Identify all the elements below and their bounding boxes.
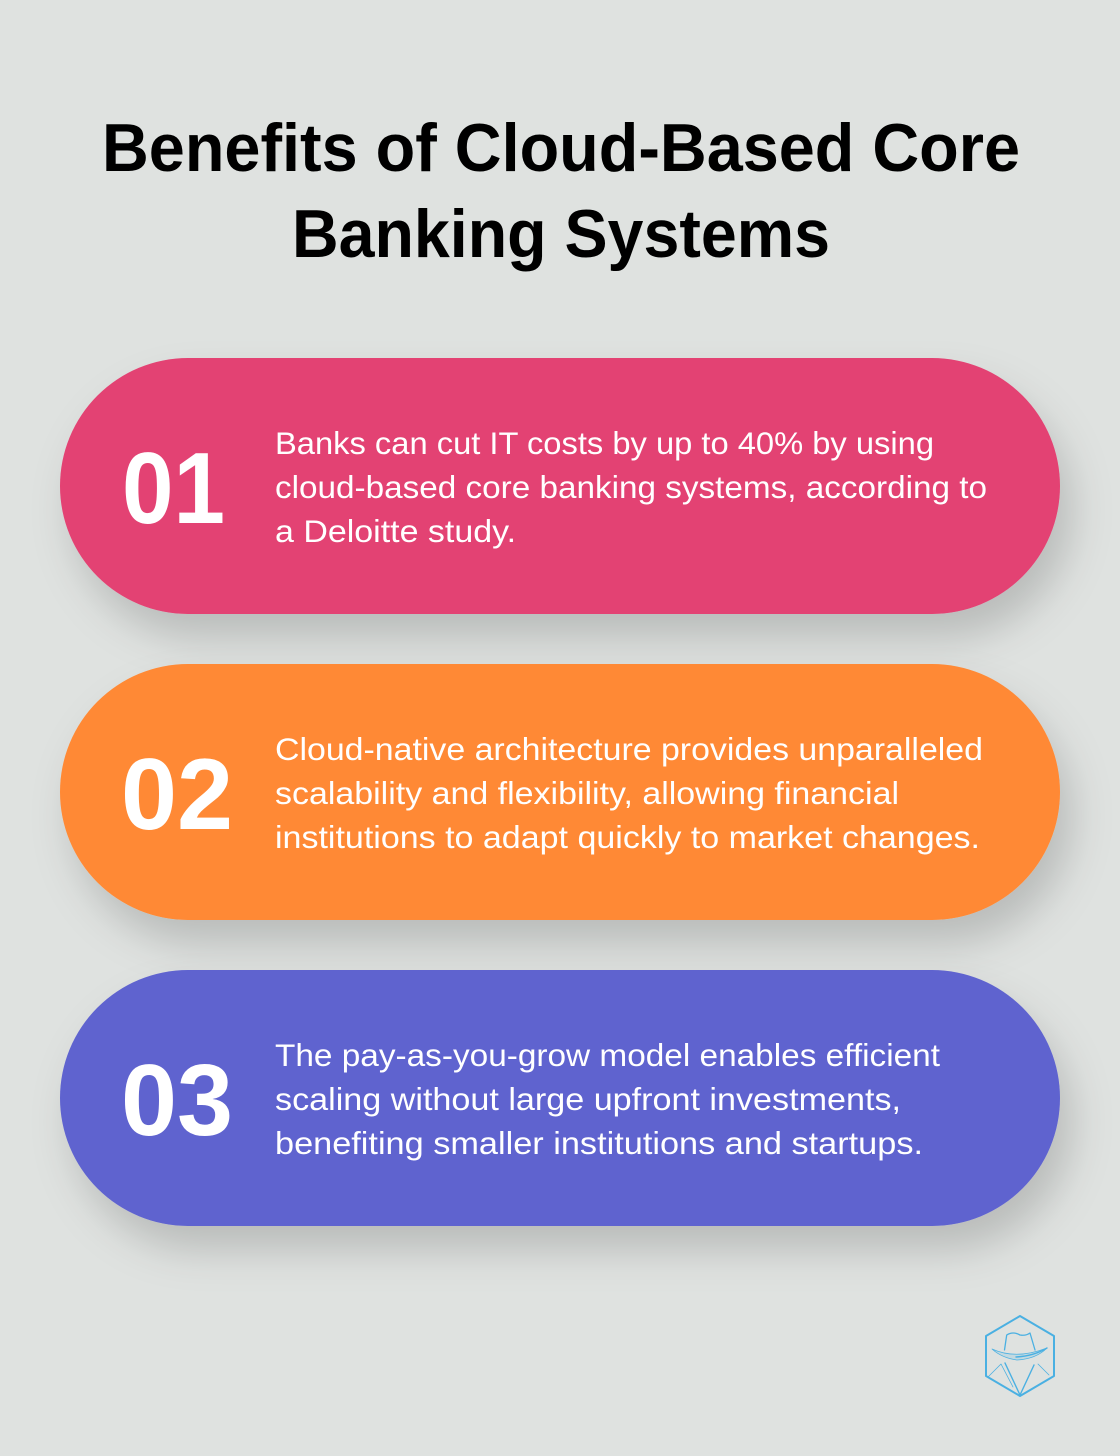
number 01: 01 bbox=[122, 433, 225, 545]
text: benefit 03 bbox=[275, 1037, 940, 1161]
title: Banking Systems bbox=[292, 196, 830, 272]
icon: hexagon spy logo bbox=[986, 1316, 1054, 1396]
title: Benefits of Cloud-Based Core bbox=[102, 110, 1020, 186]
panel: benefit 01 bbox=[60, 358, 1060, 614]
pill: benefit 01 background bbox=[60, 358, 1060, 614]
pill: benefit 02 background bbox=[60, 664, 1060, 920]
pill: benefit 03 background bbox=[60, 970, 1060, 1226]
text: benefit 01: cloud-based core banking systems, according to bbox=[275, 469, 987, 505]
title bbox=[102, 110, 1020, 272]
text: benefit 01: Banks can cut IT costs by up to 40% by using bbox=[275, 425, 934, 461]
panel: benefit 02 bbox=[60, 664, 1060, 920]
text: benefit 02: Cloud-native architecture provides unparalleled bbox=[275, 731, 983, 767]
text: benefit 03: benefiting smaller institutions and startups. bbox=[275, 1125, 923, 1161]
panel: benefit 03 bbox=[60, 970, 1060, 1226]
number 02: 02 bbox=[121, 739, 233, 851]
text: benefit 02: institutions to adapt quickly to market changes. bbox=[275, 819, 980, 855]
text: benefit 01: a Deloitte study. bbox=[275, 513, 516, 549]
text: benefit 02 bbox=[275, 731, 983, 855]
text: benefit 01 bbox=[275, 425, 987, 549]
text: benefit 03: The pay-as-you-grow model enables efficient bbox=[275, 1037, 940, 1073]
text: benefit 02: scalability and flexibility, allowing financial bbox=[275, 775, 899, 811]
text: benefit 03: scaling without large upfront investments, bbox=[275, 1081, 901, 1117]
number 03: 03 bbox=[121, 1045, 233, 1157]
